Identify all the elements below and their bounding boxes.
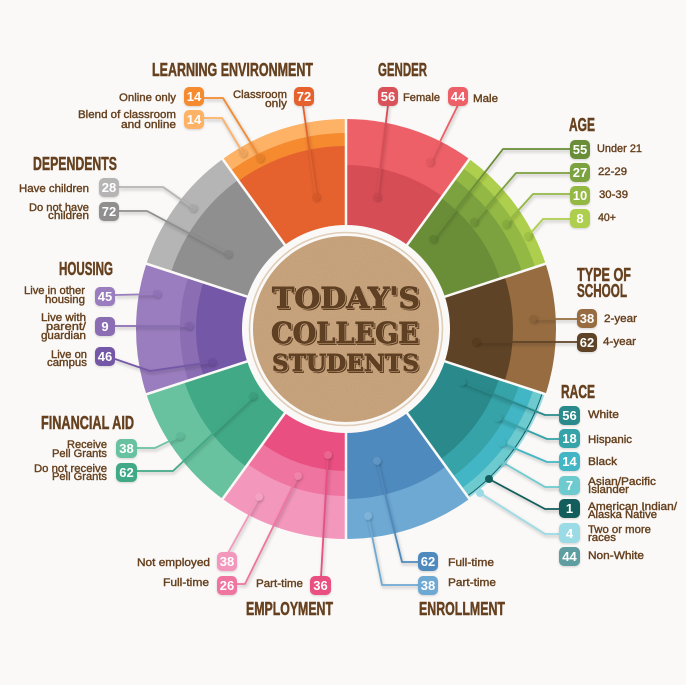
item: american indian alaska native 1 (485, 475, 678, 521)
item: 22-29 27: 22-29 (598, 166, 627, 178)
item: american indian alaska native 1: American Indian/ (588, 501, 678, 513)
item: online only 14 (119, 87, 264, 162)
item: american indian alaska native 1: Alaska Native (588, 509, 657, 521)
item: 40+ 8 (524, 209, 616, 240)
wedge: learning environment rings (223, 87, 446, 329)
heading: learning environment: LEARNING ENVIRONMENT (152, 60, 313, 80)
panel: learning environment (78, 60, 446, 329)
panel: race (308, 329, 678, 566)
title: STUDENTS (272, 350, 419, 377)
item: do not receive pell grants 62: Pell Grants (52, 471, 107, 483)
item: blend of classroom and online 14: Blend of classroom (78, 109, 176, 121)
item: live on campus 46: 46 (98, 349, 112, 364)
heading: housing: HOUSING (59, 259, 113, 279)
item: online only 14: 14 (187, 89, 202, 104)
item: 2-year 38 (529, 309, 637, 328)
heading: enrollment: ENROLLMENT (419, 599, 505, 619)
item: hispanic 18: Hispanic (588, 434, 633, 446)
panel: gender (346, 60, 498, 329)
item: part-time 38: 38 (421, 578, 435, 593)
item: full-time 62: Full-time (448, 557, 494, 569)
item: male 44 (426, 87, 498, 166)
item: 22-29 27: 27 (573, 165, 587, 180)
wedge: dependents rings (146, 147, 384, 329)
item: live on campus 46: campus (47, 357, 88, 369)
item: not employed 38: 38 (220, 554, 234, 569)
item: 4-year 62 (472, 333, 636, 352)
item: part-time 36: Part-time (256, 578, 303, 590)
item: asian pacific islander 7: Asian/Pacific (588, 476, 657, 488)
item: part-time 38: Part-time (448, 577, 496, 589)
item: non-white 44: Non-White (588, 550, 644, 562)
item: american indian alaska native 1: 1 (566, 501, 573, 516)
item: non-white 44 (559, 547, 644, 566)
item: 40+ 8: 8 (576, 211, 584, 226)
item: live on campus 46: Live on (51, 349, 87, 361)
panel: type of school (346, 264, 637, 446)
item: do not have children 72 (29, 202, 232, 258)
panel: dependents (19, 147, 384, 329)
heading: dependents: DEPENDENTS (33, 154, 117, 174)
item: 2-year 38: 38 (580, 311, 594, 326)
item: classroom only 72: 72 (297, 89, 311, 104)
item: two or more races 4: races (588, 532, 617, 544)
heading: gender: GENDER (378, 60, 427, 80)
item: full-time 26: 26 (220, 578, 234, 593)
item: 2-year 38: 2-year (604, 313, 637, 325)
item: live with parent guardian 9: 9 (101, 319, 109, 334)
panel: financial aid (34, 256, 346, 499)
item: male 44: 44 (451, 89, 466, 104)
item: part-time 36: 36 (313, 578, 328, 593)
item: 4-year 62: 62 (580, 335, 594, 350)
heading: type of school: TYPE OF (577, 265, 631, 285)
item: live with parent guardian 9: guardian (41, 330, 86, 342)
item: live with parent guardian 9 (41, 312, 193, 342)
item: 40+ 8: 40+ (598, 212, 616, 224)
item: classroom only 72: Classroom (233, 89, 287, 101)
item: white 56 (458, 378, 619, 425)
item: receive pell grants 38: Receive (67, 439, 107, 451)
wedge: financial aid rings (123, 256, 346, 499)
item: female 56: 56 (381, 89, 395, 104)
item: live on campus 46 (47, 347, 216, 371)
item: asian pacific islander 7: 7 (566, 478, 573, 493)
wedge: enrollment rings (246, 329, 469, 571)
item: under 21 55: 55 (573, 142, 587, 157)
title (271, 281, 420, 377)
kraft paper disc (253, 236, 439, 422)
item: under 21 55: Under 21 (597, 143, 642, 155)
wedge: gender rings (346, 119, 469, 329)
item: male 44: Male (473, 93, 498, 105)
item: 4-year 62: 4-year (603, 336, 636, 348)
item: white 56: White (588, 409, 619, 421)
item: blend of classroom and online 14: and online (121, 119, 176, 131)
item: do not receive pell grants 62 (34, 392, 257, 483)
item: asian pacific islander 7: Islander (588, 484, 629, 496)
panel: enrollment (246, 329, 505, 619)
item: not employed 38: Not employed (137, 557, 210, 569)
center badge (242, 225, 450, 433)
panel: age (346, 115, 642, 402)
item: part-time 38 (364, 512, 496, 595)
item: blend of classroom and online 14 (78, 109, 247, 157)
wedge: housing rings (108, 212, 346, 394)
item: full-time 26 (163, 472, 302, 595)
item: do not receive pell grants 62: 62 (119, 465, 134, 480)
heading: employment: EMPLOYMENT (246, 599, 333, 619)
item: do not have children 72: Do not have (29, 202, 89, 214)
item: do not receive pell grants 62: Do not receive (34, 463, 107, 475)
wedge: school rings (346, 264, 584, 446)
item: have children 28 (19, 178, 197, 212)
item: live in other housing 45: Live in other (24, 285, 85, 297)
item: asian pacific islander 7 (498, 458, 657, 496)
item: live in other housing 45: housing (45, 294, 85, 306)
item: white 56: 56 (562, 408, 577, 423)
item: receive pell grants 38 (52, 432, 184, 460)
wedge: age rings (346, 159, 569, 402)
item: online only 14: Online only (119, 92, 177, 104)
heading: type of school (577, 265, 631, 301)
item: non-white 44: 44 (562, 549, 577, 564)
item: 22-29 27 (470, 163, 627, 226)
item: live with parent guardian 9: parent/ (46, 321, 87, 333)
item: classroom only 72 (233, 87, 320, 201)
item: hispanic 18: 18 (562, 431, 577, 446)
item: under 21 55 (429, 140, 642, 243)
item: full-time 62 (373, 457, 494, 571)
item: do not have children 72: children (48, 210, 89, 222)
item: have children 28: 28 (102, 180, 116, 195)
item: do not have children 72: 72 (102, 204, 116, 219)
item: full-time 26: Full-time (163, 577, 209, 589)
item: receive pell grants 38: 38 (119, 441, 134, 456)
item: female 56 (373, 87, 440, 201)
heading: financial aid: FINANCIAL AID (41, 413, 134, 433)
item: live with parent guardian 9: Live with (41, 312, 86, 324)
heading: age: AGE (569, 115, 595, 135)
heading: race: RACE (561, 382, 595, 402)
item: hispanic 18 (494, 414, 633, 448)
wedge: race rings (308, 329, 545, 510)
item: receive pell grants 38: Pell Grants (52, 448, 107, 460)
item: 30-39 10: 30-39 (599, 189, 628, 201)
item: blend of classroom and online 14: 14 (187, 112, 202, 127)
title: TODAY'S (272, 281, 420, 315)
item: 30-39 10: 10 (573, 188, 587, 203)
panel: employment (137, 329, 346, 619)
item: female 56: Female (403, 92, 440, 104)
heading: type of school: SCHOOL (577, 281, 627, 301)
item: two or more races 4 (476, 489, 651, 544)
item: 30-39 10 (502, 186, 628, 228)
item: two or more races 4: Two or more (588, 524, 651, 536)
item: black 14: Black (588, 456, 618, 468)
item: two or more races 4: 4 (566, 526, 574, 541)
item: not employed 38 (137, 493, 263, 571)
item: live in other housing 45 (24, 285, 161, 306)
title: COLLEGE (271, 316, 419, 350)
item: live in other housing 45: 45 (98, 289, 112, 304)
item: full-time 62: 62 (421, 554, 435, 569)
item: classroom only 72: only (265, 98, 288, 110)
item: black 14: 14 (562, 454, 577, 469)
item: black 14 (498, 439, 618, 471)
item: have children 28: Have children (19, 183, 89, 195)
item: part-time 36 (256, 451, 332, 595)
wedge: employment rings (223, 329, 346, 539)
panel: housing (24, 212, 346, 394)
